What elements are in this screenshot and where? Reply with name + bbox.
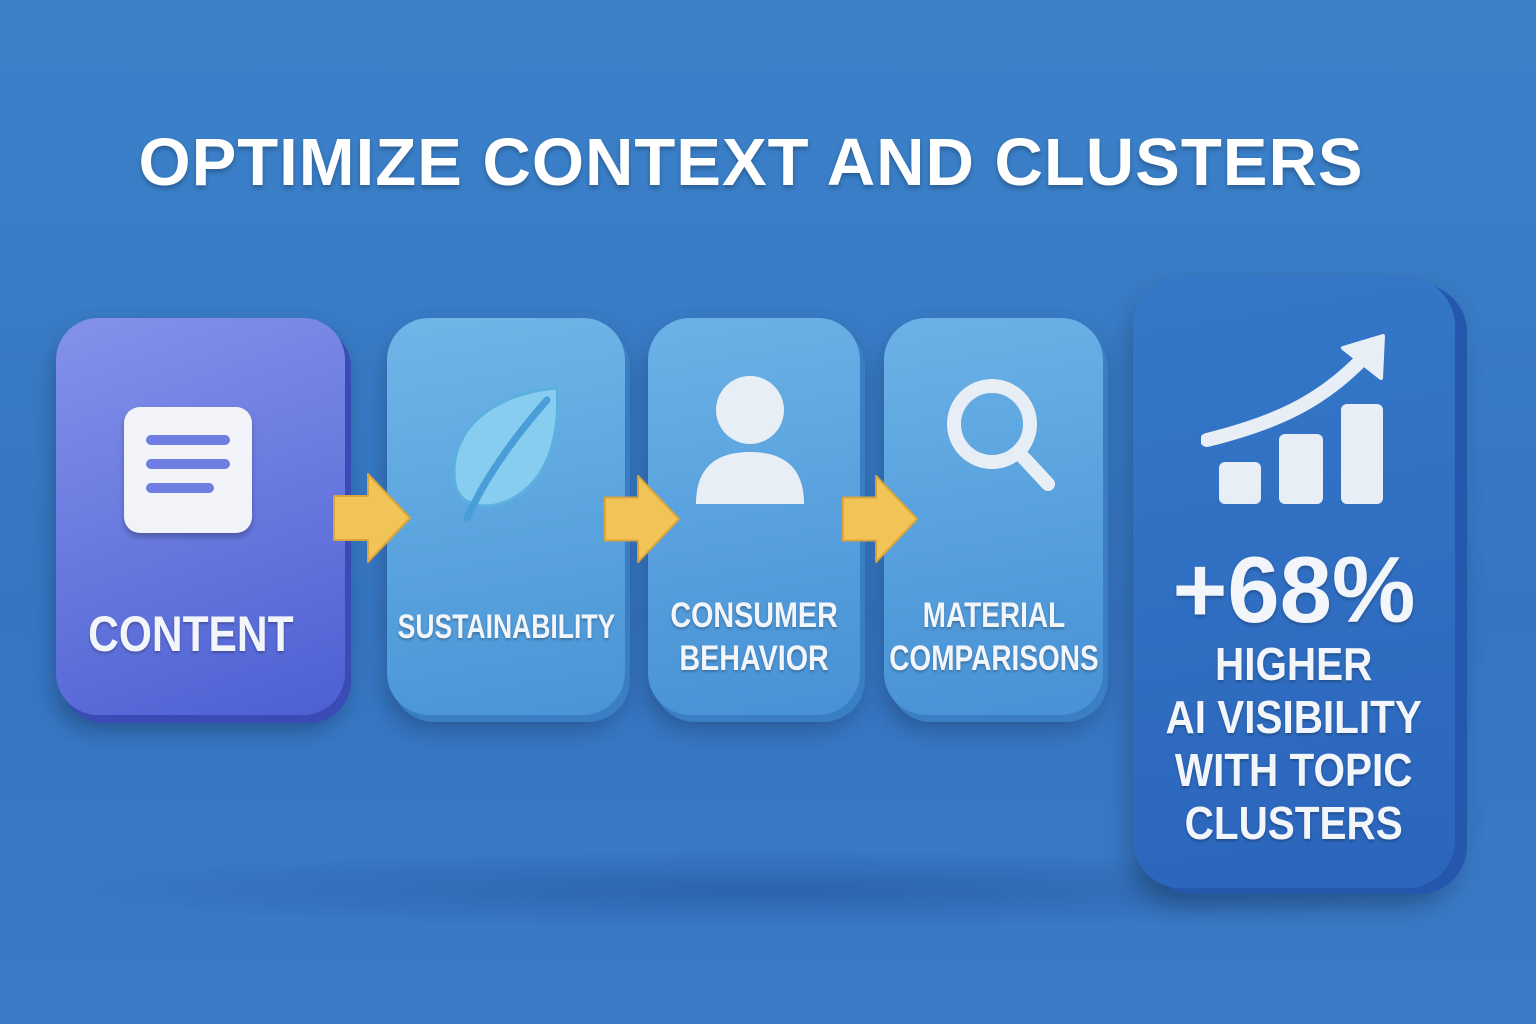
stat description bbox=[1166, 638, 1422, 849]
icon: leaf bbox=[455, 386, 559, 522]
stat description: AI VISIBILITY bbox=[1166, 691, 1422, 743]
label: consumer behavior: BEHAVIOR bbox=[679, 639, 829, 678]
label: material comparisons: COMPARISONS bbox=[889, 639, 1098, 678]
label: material comparisons: MATERIAL bbox=[922, 596, 1065, 635]
icon: document bbox=[124, 407, 252, 533]
icon: growth chart bbox=[1201, 334, 1385, 504]
label: consumer behavior bbox=[670, 596, 838, 678]
panel: material comparisons bbox=[884, 318, 1103, 715]
label: material comparisons bbox=[889, 596, 1099, 678]
label: sustainability: SUSTAINABILITY bbox=[397, 608, 615, 646]
arrow 1 bbox=[333, 473, 411, 563]
stat description: CLUSTERS bbox=[1185, 797, 1403, 849]
floor shadow bbox=[40, 850, 1500, 930]
panel: sustainability bbox=[387, 318, 625, 715]
panel: content bbox=[56, 318, 345, 715]
stat value: +68% bbox=[1172, 537, 1416, 642]
panel: consumer behavior bbox=[648, 318, 860, 715]
panel: stat bbox=[1133, 278, 1455, 888]
label: content: CONTENT bbox=[88, 606, 293, 662]
arrow 2 bbox=[604, 475, 680, 564]
arrow 3 bbox=[842, 475, 918, 564]
title: OPTIMIZE CONTEXT AND CLUSTERS bbox=[138, 125, 1364, 200]
icon: person bbox=[696, 376, 804, 504]
label: consumer behavior: CONSUMER bbox=[670, 596, 838, 635]
stat description: WITH TOPIC bbox=[1175, 744, 1413, 796]
stat description: HIGHER bbox=[1215, 638, 1373, 690]
icon: magnifier bbox=[947, 379, 1055, 491]
